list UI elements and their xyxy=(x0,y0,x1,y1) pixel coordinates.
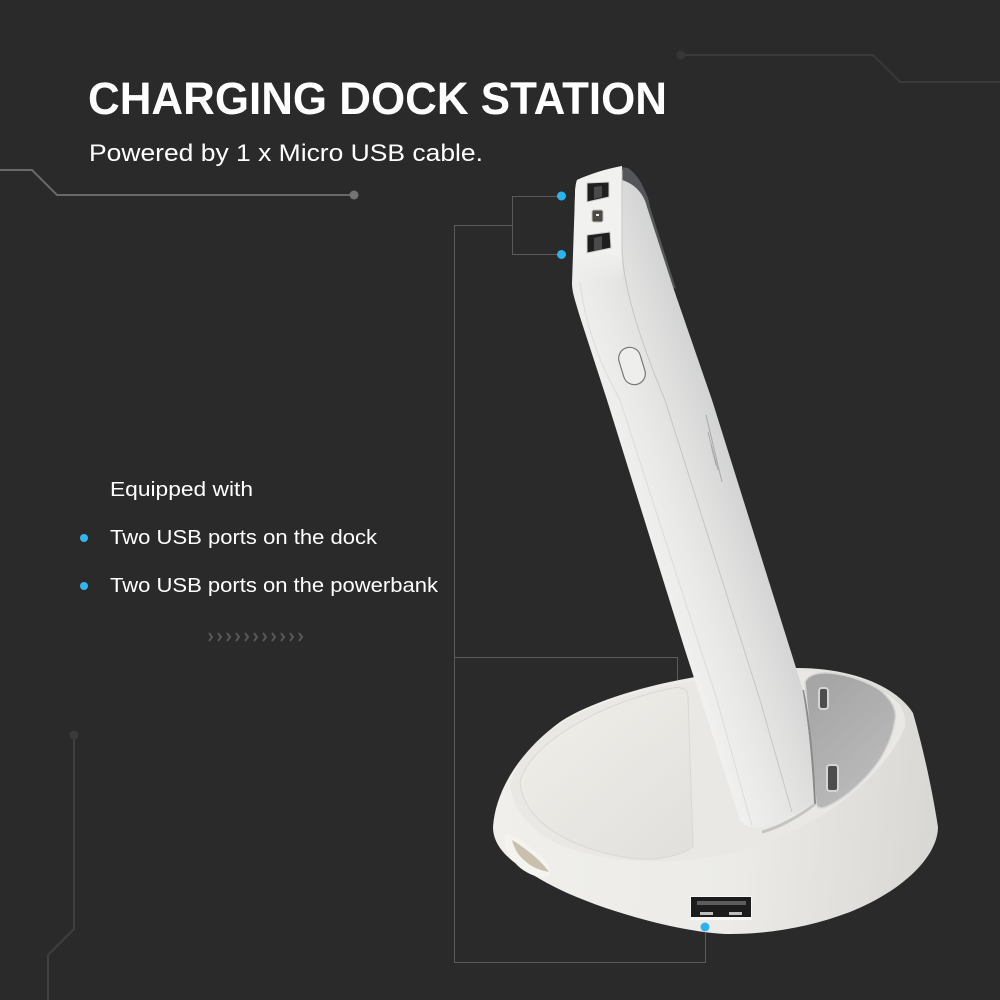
subtitle: Powered by 1 x Micro USB cable. xyxy=(89,140,483,167)
circuit line: bottom left xyxy=(48,730,78,1000)
powerbank dark back edge xyxy=(620,167,676,289)
powerbank seam lines xyxy=(580,170,792,826)
powerbank end panel xyxy=(573,166,622,285)
callout dots xyxy=(557,192,710,932)
plate: contacts xyxy=(805,673,895,808)
dock base xyxy=(493,668,938,934)
circuit line: top left xyxy=(0,170,358,200)
powerbank body xyxy=(572,166,813,828)
USB port: dock xyxy=(690,896,752,920)
powerbank xyxy=(572,166,815,832)
inner rim xyxy=(510,672,905,862)
tray recess xyxy=(520,687,693,859)
connector lines xyxy=(454,196,706,962)
circuit line: top right xyxy=(676,50,1000,82)
micro port xyxy=(592,210,603,222)
chevron row xyxy=(209,633,302,641)
embossed logo xyxy=(706,415,722,482)
USB port: powerbank top xyxy=(587,182,609,202)
dock slot shadow xyxy=(803,690,815,804)
title: CHARGING DOCK STATION xyxy=(88,73,667,124)
list item: powerbank ports: Two USB ports on the powerbank xyxy=(110,574,439,597)
side opening xyxy=(505,834,550,877)
feature list xyxy=(80,478,439,597)
list heading: Equipped with xyxy=(110,478,253,501)
list item: dock ports: Two USB ports on the dock xyxy=(110,526,378,549)
power button xyxy=(616,345,648,387)
dock pocket xyxy=(762,804,815,832)
base body xyxy=(493,668,938,934)
USB port: powerbank bottom xyxy=(587,232,611,253)
